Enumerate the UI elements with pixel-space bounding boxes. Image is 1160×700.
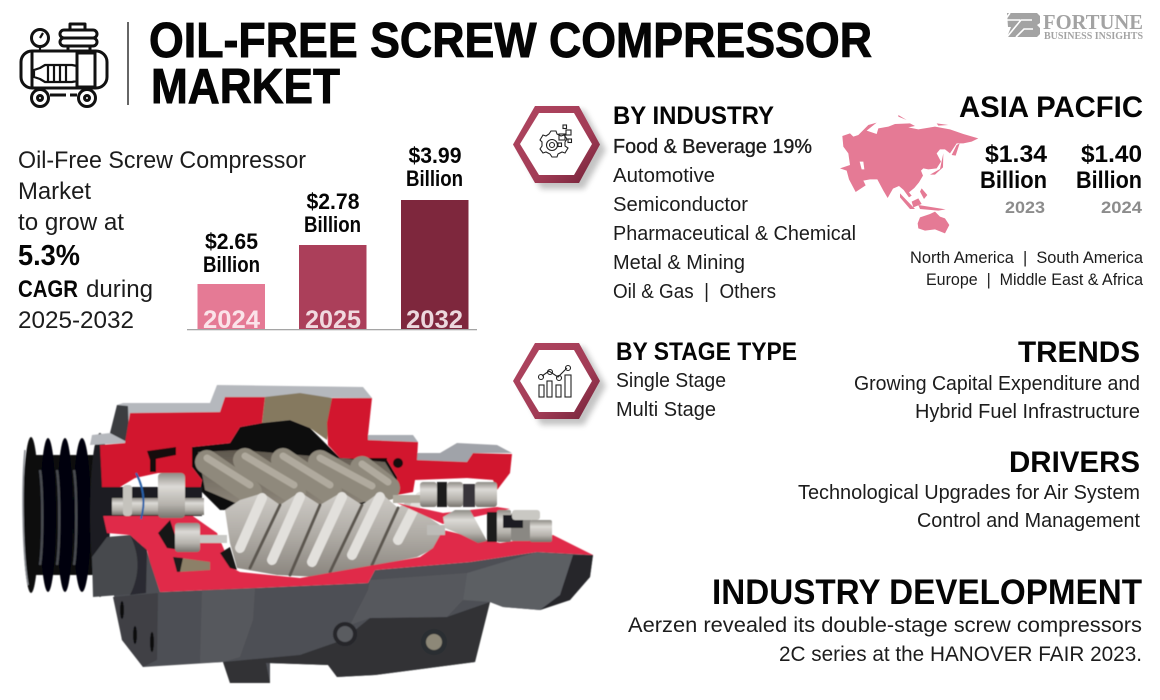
bearings and shafts — [102, 473, 552, 552]
upper housing shell — [90, 385, 372, 445]
bar: 2025 — [299, 189, 366, 334]
bar: 2025: $2.78 — [306, 189, 360, 214]
header divider — [127, 22, 129, 105]
logo: Fortune Business Insights — [1005, 10, 1143, 42]
text: by industry: BY INDUSTRY — [613, 102, 774, 130]
text: industry development — [628, 573, 1142, 666]
text: Asia Pacific heading: ASIA PACFIC — [959, 91, 1143, 124]
stat: Asia Pacific 2024: Billion — [1076, 167, 1142, 194]
text: industry development: INDUSTRY DEVELOPMENT — [712, 573, 1142, 612]
text: trends — [854, 336, 1140, 423]
text: by stage type: Multi Stage — [616, 399, 716, 421]
text: by industry: Semiconductor — [613, 194, 748, 216]
bar: 2024: 2024 — [203, 306, 260, 334]
cast iron port — [262, 393, 332, 440]
text: by stage type: BY STAGE TYPE — [616, 338, 797, 366]
lower silver rotor — [225, 492, 443, 577]
logo: Fortune Business Insights: FORTUNE — [1043, 10, 1143, 34]
text: drivers: Control and Management — [917, 510, 1140, 532]
bar: 2024: $2.65 — [205, 229, 258, 254]
icon: air compressor — [21, 24, 107, 106]
stat: Asia Pacific 2023: $1.34 — [985, 141, 1048, 168]
text: by industry: Metal & Mining — [613, 252, 745, 274]
text: CAGR summary: CAGR — [18, 276, 78, 303]
map: Asia Pacific — [840, 115, 978, 233]
bar chart: market size — [187, 143, 477, 334]
lower red cross-section — [103, 512, 593, 592]
text: trends: Growing Capital Expenditure and — [854, 373, 1140, 395]
text: CAGR summary: Market — [18, 178, 91, 205]
bar: 2024 — [198, 229, 265, 334]
stat: Asia Pacific 2024: 2024 — [1101, 198, 1143, 217]
text: by industry: Automotive — [613, 165, 715, 187]
text: by stage type — [616, 338, 797, 421]
text: by industry — [613, 102, 856, 303]
text: industry development: 2C series at the HANOVER FAIR 2023. — [779, 643, 1142, 666]
stat: Asia Pacific 2023 — [980, 141, 1048, 217]
text: other regions: Europe | Middle East & Africa — [926, 271, 1144, 289]
upper red cross-section — [100, 397, 265, 490]
bar: 2024: Billion — [203, 252, 260, 277]
text: by industry: Oil & Gas | Others — [613, 281, 776, 303]
text: CAGR summary: Oil-Free Screw Compressor — [18, 147, 306, 174]
text: drivers — [798, 446, 1140, 532]
upper brown rotor — [198, 450, 396, 505]
title — [149, 14, 872, 114]
illustration: cutaway screw compressor — [23, 385, 593, 683]
bar: 2032: Billion — [406, 166, 463, 191]
text: by industry: Food & Beverage 19% — [613, 136, 812, 158]
bar: 2025: 2025 — [305, 306, 361, 334]
text: CAGR summary — [18, 147, 306, 334]
text: drivers: DRIVERS — [1009, 446, 1140, 479]
bar: 2032: $3.99 — [408, 143, 462, 168]
text: by industry: Pharmaceutical & Chemical — [613, 223, 856, 245]
pulley side collar — [92, 535, 147, 597]
dark housing body — [113, 545, 593, 683]
stat: Asia Pacific 2024 — [1076, 141, 1143, 217]
text: CAGR summary: 5.3% — [18, 240, 80, 272]
stat: Asia Pacific 2024: $1.40 — [1081, 141, 1142, 168]
icon: stage type hexagon — [513, 343, 606, 425]
bar: 2025: Billion — [304, 212, 361, 237]
text: CAGR summary: to grow at — [18, 209, 124, 236]
text: other regions: North America | South America — [910, 249, 1144, 267]
stat: Asia Pacific 2023: Billion — [980, 167, 1047, 194]
text: CAGR summary: 2025-2032 — [18, 307, 134, 334]
compressor pulley — [23, 433, 110, 597]
text: trends: TRENDS — [1018, 336, 1140, 369]
title: OIL-FREE SCREW COMPRESSOR — [149, 14, 872, 68]
text: drivers: Technological Upgrades for Air System — [798, 482, 1140, 504]
text: by stage type: Single Stage — [616, 370, 726, 392]
logo: Fortune Business Insights: BUSINESS INSIGHTS — [1044, 31, 1143, 42]
bar: 2032 — [401, 143, 468, 334]
text: CAGR summary: during — [86, 276, 153, 303]
rotor cavity — [192, 420, 397, 510]
text: trends: Hybrid Fuel Infrastructure — [915, 401, 1140, 423]
text: other regions — [910, 249, 1144, 289]
icon: industry hexagon — [513, 106, 606, 189]
bar: 2032: 2032 — [406, 306, 463, 334]
title: MARKET — [151, 60, 340, 114]
stat: Asia Pacific 2023: 2023 — [1005, 198, 1045, 217]
text: industry development: Aerzen revealed its double-stage screw compressors — [628, 614, 1142, 637]
